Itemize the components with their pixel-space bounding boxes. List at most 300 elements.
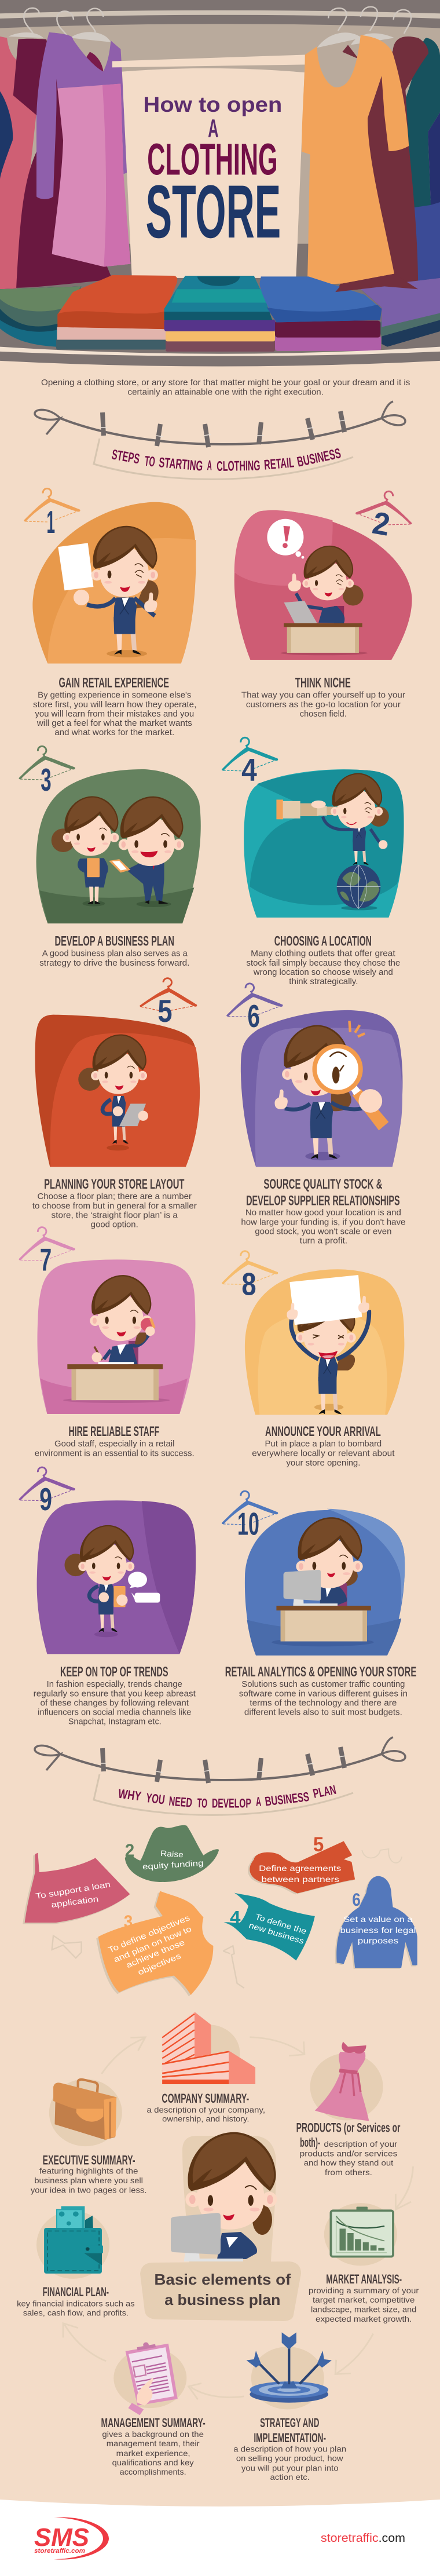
step 2 text: chosen field. [300, 710, 347, 719]
maroon neckline [84, 52, 103, 72]
shadows [83, 901, 105, 907]
step 10 character [272, 1517, 374, 1646]
hoodie: value for legal purposes: purposes [358, 1937, 398, 1946]
board clip [357, 2206, 368, 2210]
dress icon [310, 2041, 383, 2121]
hoodie: value for legal purposes: 6 [352, 1889, 361, 1910]
step 10 blob shade [247, 1618, 401, 1656]
bun [64, 1554, 87, 1576]
jacket [318, 606, 344, 623]
step 2 character [281, 546, 368, 655]
tank top: define new business: new business [247, 1921, 305, 1946]
central title: a business plan [164, 2291, 280, 2308]
step 10 hanger [222, 1491, 278, 1525]
number 5: 5 [157, 993, 173, 1029]
step 3 text: A good business plan also serves as a [42, 949, 188, 958]
step 10 text: different levels also to suit most budgets. [244, 1708, 402, 1718]
flap [53, 2082, 116, 2117]
speech bubbles [128, 1572, 147, 1587]
waist [339, 2069, 358, 2074]
step 5 text: good option. [91, 1221, 138, 1230]
step 2 heading: THINK NICHE [295, 675, 351, 691]
t-shirt: define objectives [96, 1891, 213, 1997]
step 7 hanger [19, 1227, 75, 1260]
management text: qualifications and key [112, 2458, 194, 2467]
company summary text: ownership, and history. [162, 2114, 249, 2124]
axis [336, 2216, 387, 2253]
number 6: 6 [248, 999, 260, 1034]
central title plate [140, 2261, 301, 2321]
step 6 text [241, 1208, 405, 1246]
globe [341, 906, 377, 910]
step 2 blob [234, 510, 412, 660]
step 4 text: think strategically. [289, 977, 358, 986]
executive summary text: business plan where you sell [34, 2176, 143, 2185]
wallet icon [36, 2206, 109, 2279]
tall face [162, 2012, 195, 2074]
step 8 text: everywhere locally or relevant about [252, 1449, 394, 1459]
tall stripes [162, 2014, 195, 2071]
step 1 text [33, 690, 196, 737]
step 1 text: will get a feel for what the market wants [36, 719, 192, 728]
t-shirt: define objectives: To define objectives [107, 1914, 192, 1955]
step 9 text [34, 1680, 196, 1727]
monitor [171, 2213, 221, 2255]
faint bow tie [52, 1935, 82, 1958]
maroon dress right [335, 36, 428, 292]
skirt pleats [340, 2073, 361, 2096]
market analysis text: target market, competitive [313, 2295, 415, 2304]
body [310, 1102, 338, 1159]
desk [63, 1397, 170, 1403]
products text: and how they stand out [304, 2158, 393, 2167]
step 6 text: how large your funding is, if you don't have [241, 1218, 405, 1227]
briefcase icon [49, 2079, 122, 2146]
wallet flap back [85, 2216, 93, 2229]
step 7 character [63, 1275, 170, 1403]
hat: equity funding [125, 1825, 219, 1882]
step 9 text: influencers on social media channels like [38, 1708, 191, 1718]
tall side [195, 2012, 211, 2061]
briefcase backdrop [49, 2079, 122, 2146]
step 10 blob [245, 1510, 405, 1656]
arrow to financial plan [63, 2323, 106, 2361]
telescope [276, 799, 283, 819]
ponytail [135, 580, 159, 609]
products text: description of your [324, 2140, 398, 2149]
step 1 text: store first, you will learn how they operate, [33, 700, 196, 710]
basic elements: lower items [17, 2166, 419, 2482]
step 3 text: strategy to drive the business forward. [39, 959, 189, 968]
sparkle rays [349, 1021, 365, 1036]
title: store: STORE [146, 169, 281, 254]
management text [102, 2430, 204, 2476]
arms [87, 598, 155, 616]
pen [94, 1347, 102, 1360]
hanger bodies [9, 32, 394, 47]
shadow [94, 1632, 118, 1637]
banner heading: why: NEED [168, 1793, 193, 1810]
step 8 blob [245, 1269, 404, 1415]
central title [154, 2271, 291, 2308]
head [90, 1275, 152, 1341]
executive summary text [31, 2166, 146, 2194]
step 4 blob [244, 769, 404, 918]
step 1 hanger [24, 488, 80, 522]
trend line [337, 2221, 384, 2228]
hanger hooks [24, 7, 411, 36]
clip [137, 2344, 156, 2351]
hand [311, 801, 326, 808]
step 6 hanger [226, 984, 283, 1017]
number 4: 4 [241, 752, 257, 787]
arrow to company summary [101, 2037, 145, 2074]
faint tie [223, 1946, 244, 1988]
step 1 text: you will learn from their mistakes and you [35, 710, 194, 719]
thumbs [287, 1303, 298, 1320]
step 4 panel [222, 737, 404, 986]
paper [289, 1275, 362, 1325]
centre burst [281, 2381, 298, 2388]
hanger shoulders [9, 32, 394, 47]
faint glasses [362, 1849, 402, 1863]
step 3 blob shade [39, 887, 194, 923]
t-shirt: define objectives: 3 [124, 1911, 133, 1932]
folded pile, left green [0, 286, 82, 347]
step 5 character [78, 1035, 148, 1150]
step 6 character [275, 1021, 388, 1160]
step 4 hanger [222, 737, 278, 771]
head [331, 773, 383, 828]
number 3: 3 [41, 762, 52, 798]
step 5 text: to choose from but in general for a smaller [32, 1202, 197, 1211]
thumb hand [275, 1090, 288, 1109]
management text: market experience, [116, 2449, 190, 2458]
man head [119, 796, 184, 866]
step 5 text: Choose a floor plan; there are a number [37, 1192, 192, 1201]
step 10 panel [222, 1491, 416, 1718]
phone [113, 1586, 126, 1607]
folded pile, red [56, 338, 166, 349]
step 8 text: Put in place a plan to bombard [265, 1439, 382, 1449]
step 3 blob [36, 769, 201, 923]
raised hand [287, 573, 302, 592]
step 8 panel [222, 1251, 404, 1468]
banner heading: why: WHY [118, 1786, 142, 1803]
sock shape: define agreements [248, 1833, 355, 1894]
step 5 blob [35, 1015, 200, 1167]
products text: products and/or services [300, 2149, 397, 2158]
strategy text: a description of how you plan [233, 2445, 346, 2453]
step 9 blob shade [142, 1501, 196, 1654]
bars [339, 2228, 384, 2250]
basic elements: upper items [43, 2012, 400, 2167]
step 8 blob highlight [258, 1312, 387, 1415]
arrow to management [189, 2383, 244, 2399]
cuff [129, 2403, 144, 2415]
step 4 heading: CHOOSING A LOCATION [274, 933, 372, 949]
step 2 text [241, 690, 405, 719]
wallet fold [84, 2253, 102, 2265]
handle [78, 2080, 98, 2093]
products heading: both)- [300, 2135, 320, 2150]
step 9 text: Snapchat, Instagram etc. [68, 1718, 162, 1727]
financial plan text: key financial indicators such as [17, 2299, 135, 2308]
skirt: support a loan: application [50, 1895, 99, 1910]
notebook [87, 858, 100, 877]
head [78, 1525, 134, 1585]
front banknote [57, 2209, 83, 2228]
intro text [41, 378, 410, 397]
orange dress [302, 35, 409, 285]
financial plan heading: FINANCIAL PLAN- [43, 2285, 109, 2299]
logo letters: SMS [34, 2523, 89, 2552]
laptop [284, 601, 317, 623]
shadow [107, 1145, 129, 1150]
step 6 panel [226, 984, 405, 1246]
reasons: clothing shapes [23, 1825, 417, 1997]
monitor stand [294, 1586, 303, 1605]
number 2: 2 [370, 505, 393, 543]
step 10 text: Solutions such as customer traffic counting [241, 1680, 405, 1689]
hands [113, 1106, 123, 1116]
footer white area [0, 2500, 440, 2576]
wall lower shadow [0, 244, 440, 356]
hero: wardrobe illustration [0, 0, 440, 397]
financial plan text: sales, cash flow, and profits. [23, 2308, 129, 2317]
step 2 panel [234, 491, 412, 719]
step 3 text [39, 949, 189, 968]
phone [141, 1318, 154, 1331]
ponytail [344, 1568, 358, 1586]
banner heading: steps: STARTING [158, 455, 203, 474]
title: clothing: CLOTHING [147, 135, 278, 184]
number 8: 8 [241, 1266, 256, 1302]
clasp [86, 2246, 103, 2253]
ponytail [335, 1354, 355, 1371]
step 4 character [276, 773, 389, 910]
arrow shafts [257, 2341, 321, 2386]
step 9 blob [37, 1500, 196, 1654]
head [296, 1294, 356, 1357]
hat: equity funding: 2 [125, 1840, 134, 1861]
body [353, 826, 369, 865]
back banknote [61, 2206, 85, 2228]
collar [342, 2041, 366, 2054]
products text end: from others. [325, 2168, 372, 2177]
step 10 text: software come in various different guises in [239, 1690, 408, 1699]
side [104, 2097, 116, 2140]
clasp [76, 2109, 103, 2122]
step 1 blob highlight [47, 538, 196, 663]
hand on handle [358, 1089, 382, 1113]
tank top: define new business: 4 [230, 1907, 240, 1927]
step 10 text: terms of the technology and there are [250, 1699, 397, 1708]
company summary heading: COMPANY SUMMARY- [162, 2091, 249, 2106]
body [98, 1584, 118, 1632]
step 7 blob shade [40, 1378, 188, 1414]
desk [272, 1638, 374, 1646]
market analysis text: providing a summary of your [309, 2286, 419, 2295]
management heading: MANAGEMENT SUMMARY- [101, 2416, 206, 2430]
step 8 character [287, 1275, 369, 1414]
market analysis text: landscape, market size, and [311, 2305, 416, 2314]
strategy text: you will put your plan into [241, 2464, 339, 2472]
products heading [296, 2120, 400, 2150]
head [91, 526, 158, 597]
step 5 heading: PLANNING YOUR STORE LAYOUT [44, 1176, 185, 1192]
disk side [250, 2386, 328, 2403]
step 3 hanger [19, 746, 75, 780]
step 6 text: turn a profit. [300, 1237, 347, 1246]
building icon [162, 2012, 255, 2084]
step 8 text: your store opening. [286, 1459, 360, 1468]
management text: accomplishments. [120, 2468, 186, 2476]
woman body [78, 858, 108, 887]
SMS logo [34, 2517, 109, 2560]
jacket [320, 1584, 347, 1605]
tablet [119, 1104, 146, 1126]
step 1 text: and what works for the market. [54, 728, 174, 737]
dress skirt [315, 2070, 369, 2121]
step 2 hanger [355, 491, 412, 525]
management text: management team, their [107, 2439, 200, 2448]
banner heading: steps: RETAIL [263, 455, 295, 473]
step 4 text: Many clothing outlets that offer great [251, 949, 395, 958]
title: a: A [208, 115, 219, 143]
footer [0, 2500, 440, 2576]
paper [129, 2347, 174, 2402]
t-shirt: define objectives: and plan on how to [112, 1925, 193, 1964]
strategy heading [254, 2416, 326, 2445]
orange dress hem overlay [335, 274, 418, 292]
step 10 blob light [327, 1509, 405, 1610]
arms [104, 1335, 148, 1359]
banner heading: steps: TO [144, 454, 156, 470]
step 7 text: environment is an essential to its success. [35, 1449, 195, 1459]
step 1 panel: 1 [46, 505, 55, 540]
arms [291, 1310, 369, 1359]
banner heading: why [118, 1782, 338, 1811]
low face [162, 2051, 229, 2084]
step 5 hanger [140, 974, 201, 1017]
step 5 text: store, the ‘straight floor plan’ is a [52, 1211, 178, 1221]
market analysis text: expected market growth. [316, 2314, 412, 2323]
step 5 panel [32, 974, 201, 1230]
body [318, 1357, 342, 1414]
head [185, 2132, 277, 2230]
central title: Basic elements of [154, 2271, 291, 2288]
tank top: define new business: To define the [254, 1913, 307, 1936]
central woman [171, 2132, 277, 2261]
strategy text: action etc. [270, 2473, 310, 2482]
banner 2: rope, pegs and ribbon [35, 1737, 405, 1815]
photo box [133, 2365, 146, 2377]
jacket [108, 1344, 138, 1364]
disk top [250, 2381, 328, 2398]
step 6 blob highlight [255, 1028, 402, 1167]
step 9 heading: KEEP ON TOP OF TRENDS [60, 1664, 168, 1680]
strategy heading: IMPLEMENTATION- [254, 2431, 326, 2445]
chair [129, 1341, 138, 1365]
intro line 2: certainly an attainable one with the right execution. [128, 388, 324, 397]
desk [281, 651, 368, 655]
clipboard [126, 2344, 178, 2406]
arrow to products [250, 2037, 305, 2056]
monitor stand [184, 2236, 200, 2261]
hands [74, 590, 89, 605]
banner heading: steps: STEPS [111, 447, 141, 467]
logo swoosh [54, 2517, 109, 2560]
step 9 text: In fashion especially, trends change [47, 1680, 182, 1689]
intro line 1: Opening a clothing store, or any store for that matter might be your goal or your dream and it is [41, 378, 410, 388]
website address: storetraffic .com [321, 2532, 405, 2545]
board backdrop [324, 2203, 397, 2266]
chair [334, 606, 344, 624]
maroon dress [13, 39, 112, 288]
blue garment right [413, 196, 440, 289]
step 9 panel [19, 1467, 196, 1727]
step 3 heading: DEVELOP A BUSINESS PLAN [55, 933, 174, 949]
step 8 text [252, 1439, 394, 1468]
step 4 blob shade [250, 769, 404, 905]
title: how to open: How to open [143, 93, 282, 116]
text lines [132, 2356, 170, 2396]
banner heading: steps [111, 445, 342, 474]
banner heading: steps: A [207, 458, 212, 474]
rail highlight [0, 10, 440, 19]
shadow [107, 650, 147, 657]
top rail [0, 0, 440, 28]
target icon [247, 2332, 332, 2409]
body [113, 597, 141, 655]
step 7 heading: HIRE RELIABLE STAFF [69, 1424, 159, 1439]
step 7 text [35, 1439, 195, 1459]
step 5 text [32, 1192, 197, 1230]
step 3 characters [52, 796, 184, 907]
t-shirt: define objectives: objectives [137, 1952, 182, 1977]
step 6 text: No matter how good your location is and [245, 1208, 401, 1218]
head [296, 1517, 363, 1588]
banner heading: why: TO [197, 1796, 208, 1811]
tablet [109, 859, 130, 872]
step 4 text: stock fail simply because they chose the [247, 959, 400, 968]
shelf front [0, 352, 440, 367]
logo url: storetraffic.com [34, 2548, 85, 2555]
banner heading: why: A [255, 1794, 262, 1809]
hat: equity funding: equity funding [142, 1859, 204, 1872]
folded pile, blue [275, 335, 381, 351]
skirt: support a loan: To support a loan [35, 1880, 111, 1901]
low side [229, 2051, 255, 2084]
pink dress shade [102, 83, 130, 266]
hook group [24, 7, 411, 36]
poster rod [112, 55, 305, 67]
sock shape: define agreements: 5 [313, 1833, 324, 1856]
ponytail [331, 1091, 351, 1111]
sock shape: define agreements: Define agreements [259, 1865, 341, 1873]
skirt: support a loan [23, 1852, 130, 1924]
magnifier lens [314, 1046, 361, 1092]
paper [58, 543, 93, 590]
head [282, 1025, 349, 1096]
banner heading: why: PLAN [311, 1782, 338, 1801]
head [302, 546, 354, 600]
body [112, 1096, 129, 1144]
folded pile, right purple [359, 278, 440, 347]
banner heading: why: YOU [145, 1791, 166, 1807]
sock shape: define agreements: between partners [261, 1875, 339, 1884]
